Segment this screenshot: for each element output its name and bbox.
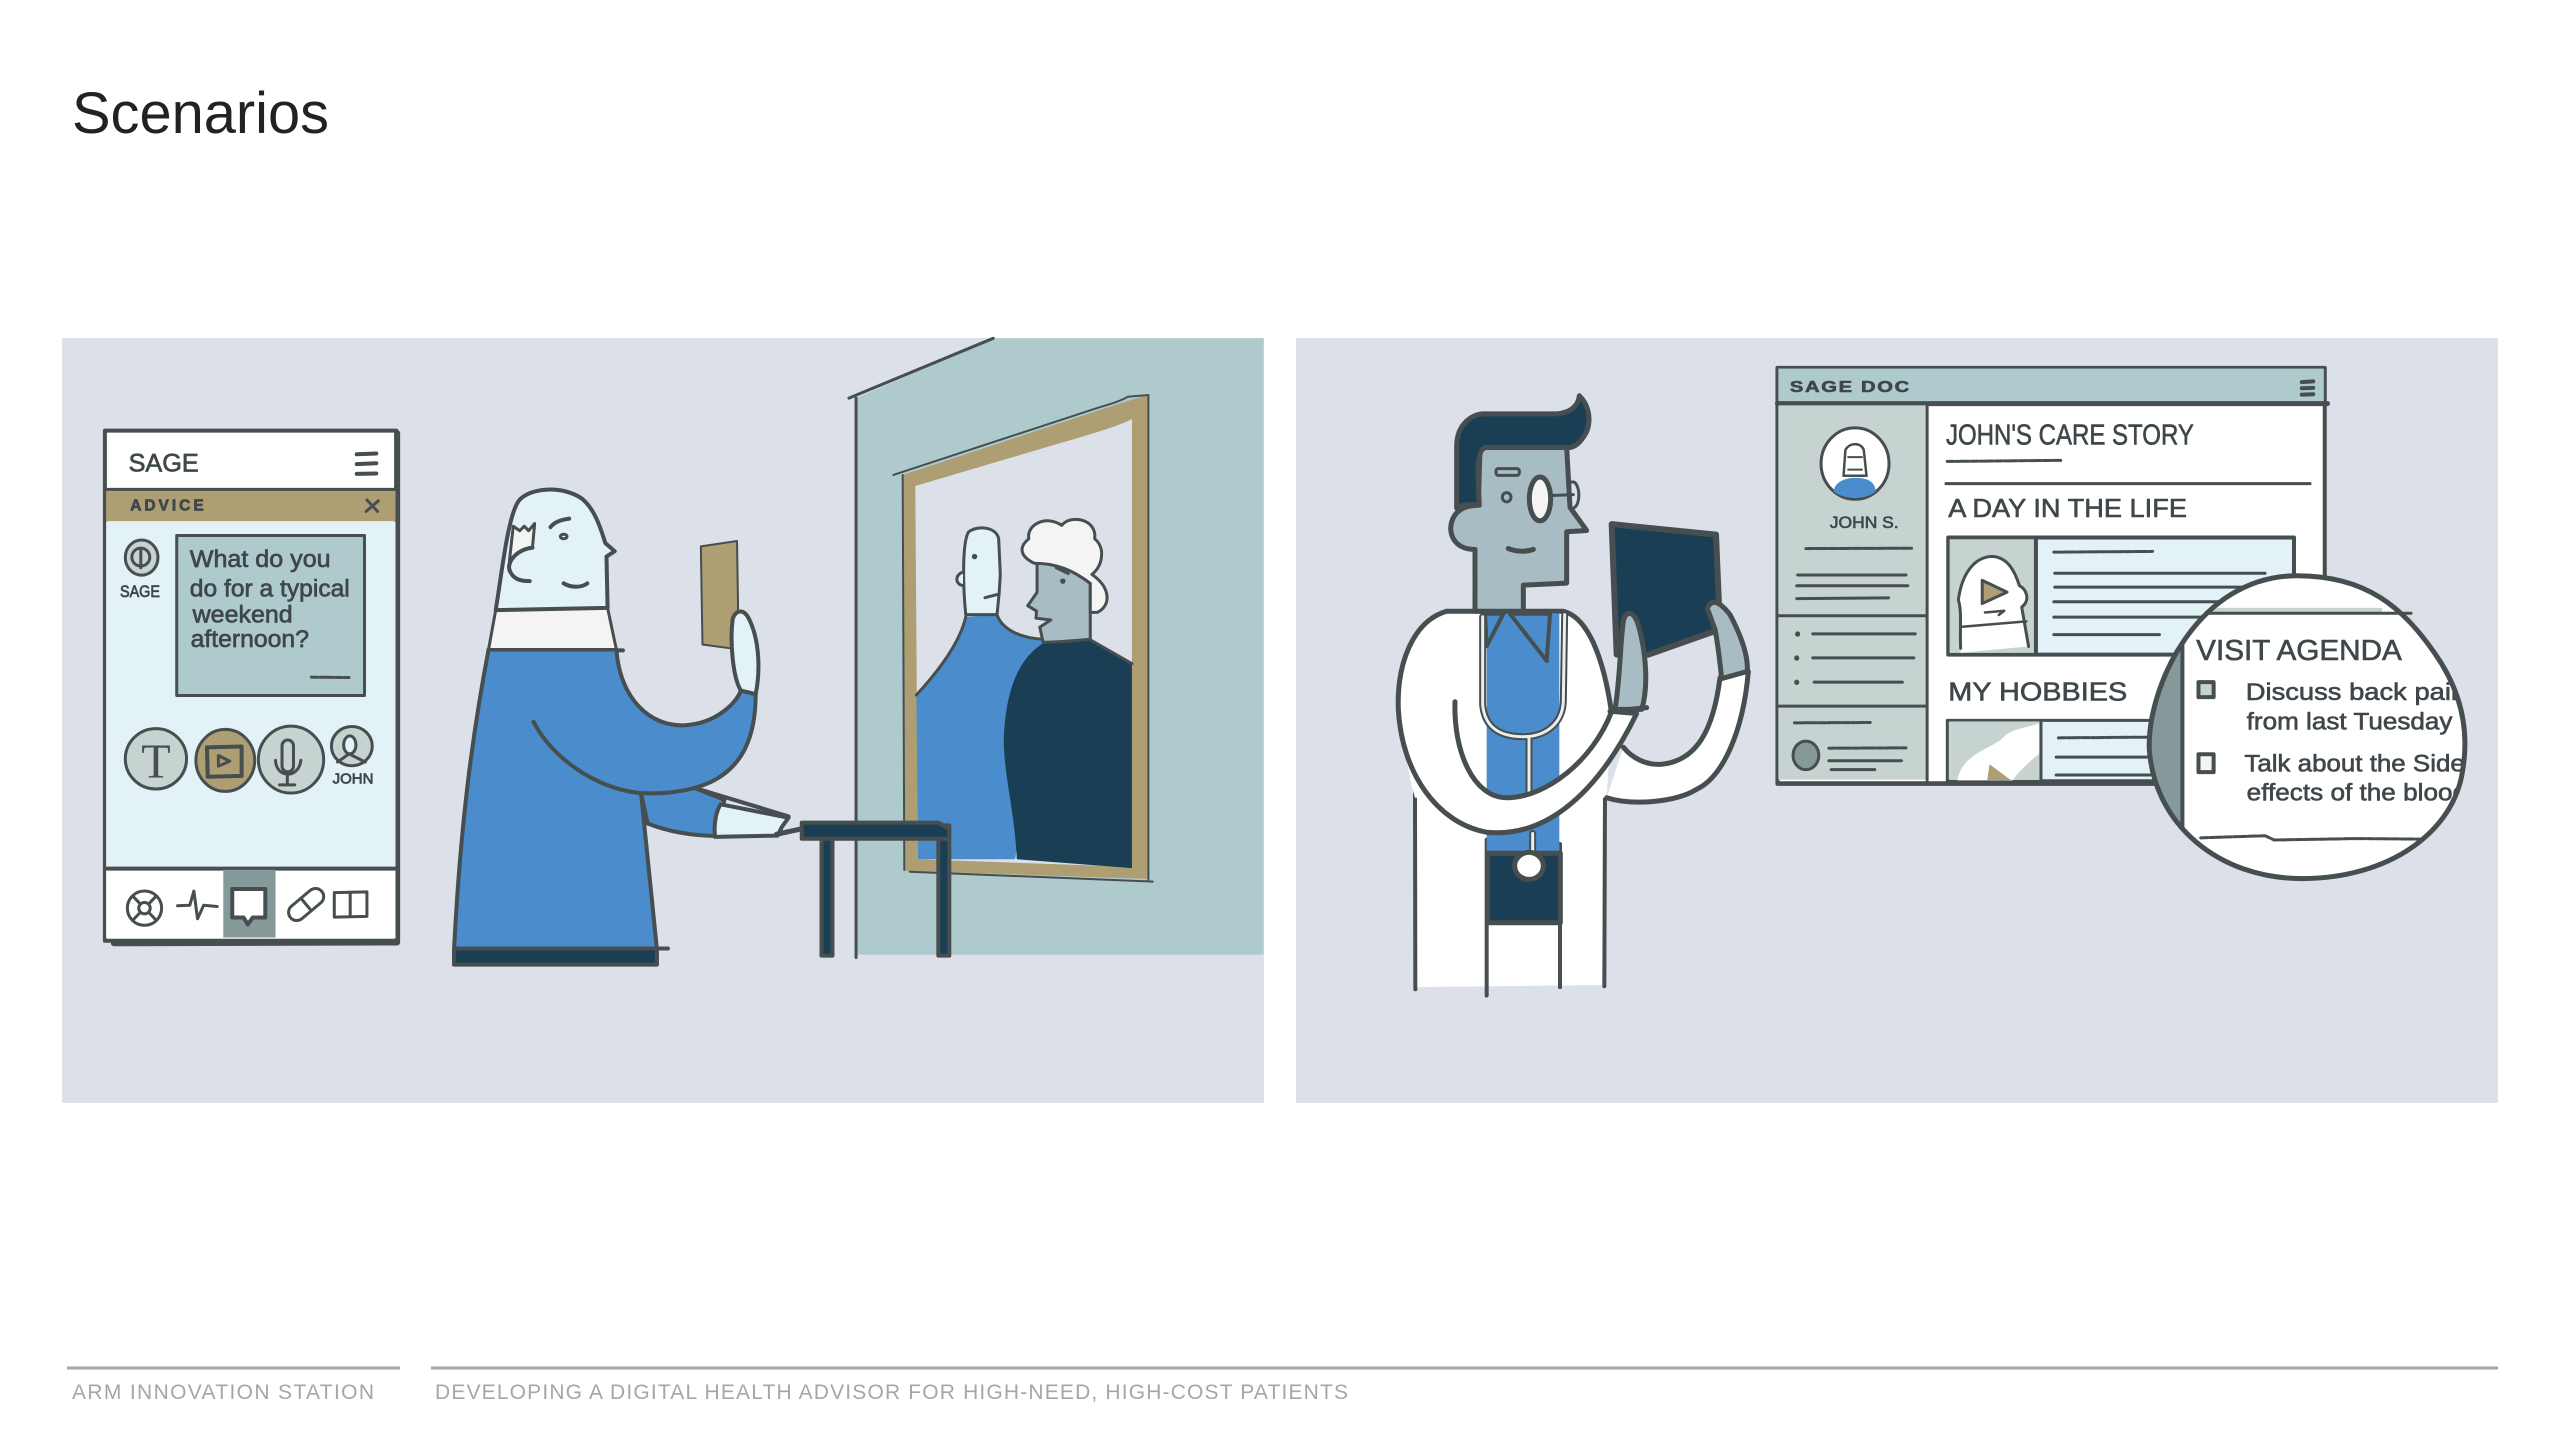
reflection: patient: [916, 528, 1043, 859]
a day in the life heading: A DAY IN THE LIFE: [1948, 495, 2187, 523]
magnifier: visit agenda: effects of the blood: [2247, 779, 2467, 806]
icon: chat bubble: [232, 889, 265, 924]
sidebar: [1778, 405, 1927, 780]
phone app: Sage advice: [105, 431, 397, 943]
chest piece: [1515, 852, 1543, 879]
right hand: [1707, 602, 1747, 679]
footer: section label: ARM INNOVATION STATION: [72, 1381, 374, 1404]
icon: text button: [125, 729, 187, 789]
icon: Sage avatar: SAGE: [120, 583, 160, 601]
hobbies card: [1947, 720, 2173, 781]
app header: SAGE: [129, 449, 199, 477]
tablet: [1612, 524, 1720, 655]
magnifier: visit agenda: from last Tuesday: [2247, 708, 2452, 734]
video card: [1948, 537, 2294, 655]
icon: John avatar: JOHN: [333, 772, 373, 788]
icon: Sage avatar: [120, 540, 160, 601]
title bar: [1777, 369, 2327, 404]
icon: audio button: [258, 726, 324, 793]
footer: project title: [431, 1366, 2498, 1404]
right arm: [1607, 671, 1748, 802]
table: [802, 823, 949, 956]
icon: video button: [196, 729, 255, 791]
sidebar: JOHN S.: [1830, 514, 1899, 532]
question bubble: [177, 536, 364, 696]
question bubble: afternoon?: [191, 626, 309, 653]
question bubble: do for a typical: [190, 575, 350, 602]
mirror: [893, 395, 1153, 882]
title bar: SAGE DOC: [1790, 378, 1909, 396]
video thumbnail figure: [1958, 556, 2029, 653]
wall and mirror scene: [454, 338, 1264, 965]
face details: [1496, 469, 1579, 551]
icon: small avatar: [1793, 741, 1819, 770]
panel: patient scenario: [62, 338, 1264, 1103]
title: Scenarios: [72, 81, 329, 146]
icon: John portrait: [1821, 428, 1889, 499]
lab coat: [1415, 781, 1607, 987]
magnifier: visit agenda: VISIT AGENDA: [2196, 634, 2402, 666]
doctor figure: [1398, 396, 1748, 996]
footer: project title: DEVELOPING A DIGITAL HEALTH ADVISOR FOR HIGH-NEED, HIGH-COST PATIENTS: [435, 1381, 1348, 1404]
icon: John avatar: [331, 727, 373, 788]
wall: [856, 338, 1264, 955]
question bubble: weekend: [192, 601, 293, 628]
icon: life ring: [127, 891, 162, 925]
my hobbies heading: MY HOBBIES: [1948, 678, 2127, 707]
reflection: doctor: [1004, 519, 1132, 868]
wall outline: [849, 338, 993, 957]
left arm: [1398, 611, 1637, 833]
response buttons: [125, 726, 373, 793]
advice bar: [106, 489, 396, 521]
panel: doctor scenario: [1296, 338, 2498, 1103]
app body: [106, 522, 396, 868]
bottom navigation: [106, 869, 396, 938]
hair: [1457, 396, 1589, 508]
neck and head: [1451, 448, 1587, 611]
advice bar: ADVICE: [130, 498, 204, 515]
care story heading: JOHN'S CARE STORY: [1946, 418, 2194, 450]
left hand: [1615, 613, 1646, 709]
icon: text button: T: [141, 736, 171, 789]
icon: pill: [285, 885, 327, 924]
footer: section label: [67, 1366, 400, 1404]
icon: pulse: [178, 891, 217, 919]
magnifier: visit agenda: Discuss back pain: [2246, 678, 2466, 705]
browser window: Sage Doc: [1777, 368, 2467, 879]
icon: book: [334, 892, 367, 917]
stethoscope: [1483, 615, 1565, 852]
magnifier: visit agenda: Talk about the Side: [2244, 750, 2465, 777]
magnifier: visit agenda: [2141, 576, 2467, 879]
patient figure: [454, 490, 801, 965]
question bubble: What do you: [190, 546, 331, 573]
shirt: [1485, 614, 1560, 923]
bullet list: [1797, 634, 1915, 682]
app header: [129, 449, 376, 477]
